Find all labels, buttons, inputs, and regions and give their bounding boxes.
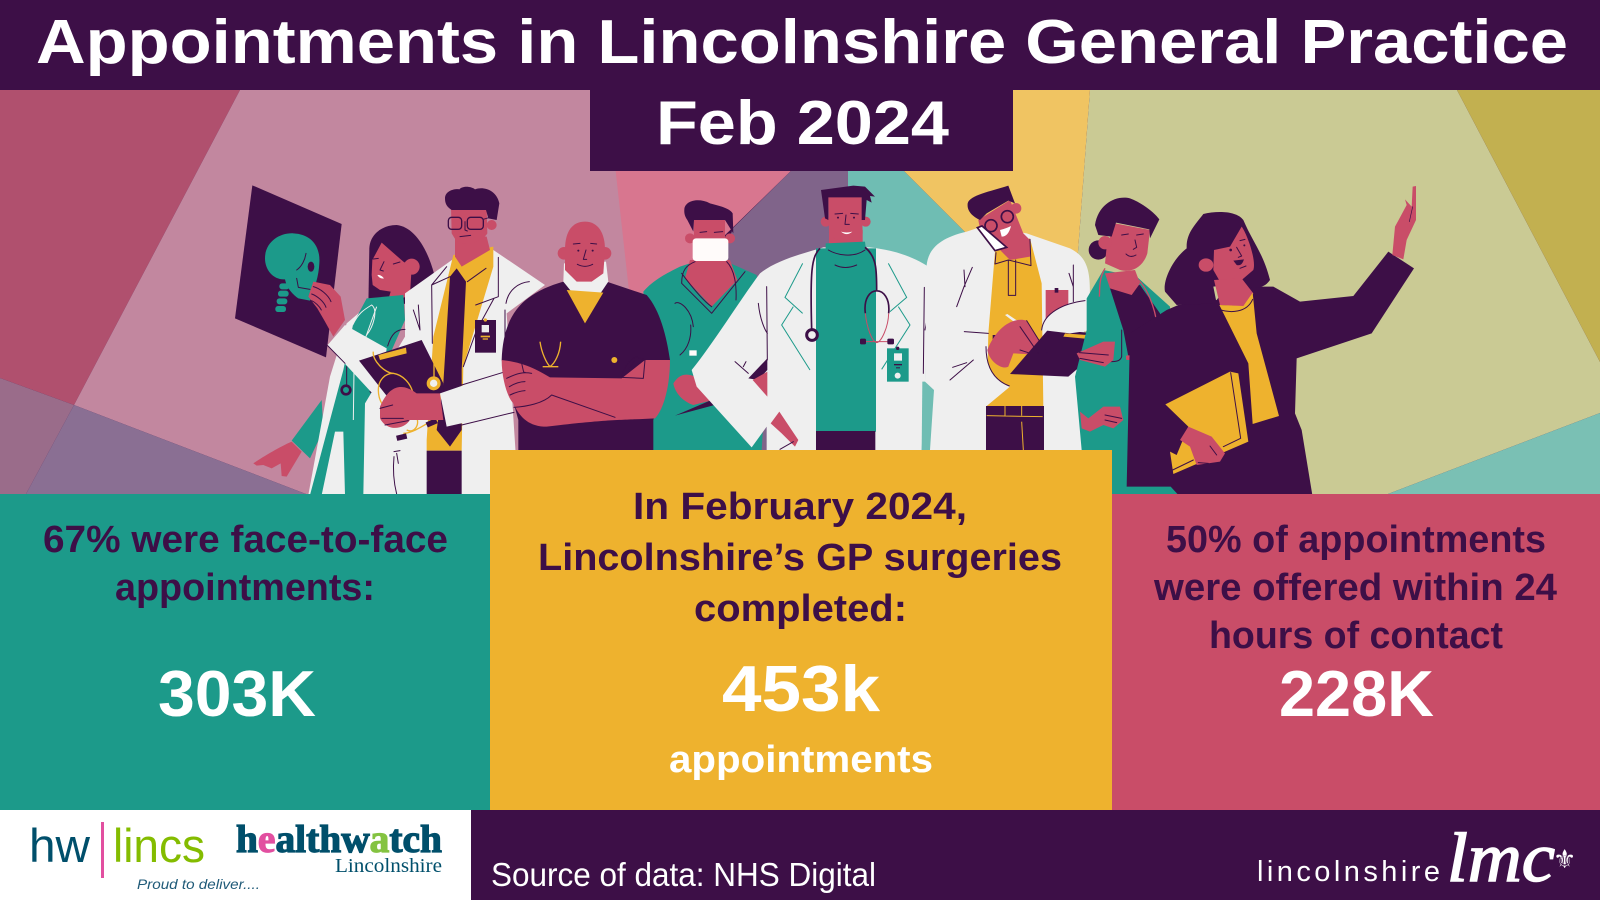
logo: hw lincs: lincs bbox=[113, 819, 205, 872]
logo: healthwatch Lincolnshire: healthwatch bbox=[236, 818, 442, 861]
figure: nurse with bun and woman in black bbox=[1075, 186, 1416, 495]
logo: healthwatch Lincolnshire: Lincolnshire bbox=[335, 855, 442, 877]
logo: hw lincs bbox=[29, 819, 260, 892]
figure: woman with x-ray and doctor with tie and bald man bbox=[235, 185, 670, 495]
logo: lincolnshire lmc: lincolnshire bbox=[1257, 856, 1440, 888]
figure: nurse with bun bbox=[1075, 198, 1179, 495]
figure: centre doctor with stethoscope bbox=[692, 186, 931, 450]
panel: within 24 hours: hours of contact bbox=[1209, 615, 1503, 657]
panel: total appointments: appointments bbox=[669, 739, 933, 781]
figure: woman in coat bbox=[253, 225, 434, 495]
figure: centre doctor and phone doctor bbox=[692, 186, 1155, 450]
panel: within 24 hours: 50% of appointments bbox=[1166, 519, 1546, 561]
figure: bald man with folded arms bbox=[502, 222, 670, 450]
panel: face-to-face: 67% were face-to-face bbox=[43, 519, 448, 561]
figure: nurse with mask bbox=[643, 200, 767, 450]
panel: total appointments: 453k bbox=[722, 652, 881, 725]
icon: x-ray with skull bbox=[235, 185, 342, 357]
panel: total appointments: completed: bbox=[694, 588, 907, 630]
logo: hw lincs: Proud to deliver.... bbox=[137, 876, 260, 892]
panel: total appointments: Lincolnshire’s GP surgeries bbox=[538, 537, 1062, 579]
panel: within 24 hours: 228K bbox=[1279, 657, 1434, 730]
title bar: Appointments in Lincolnshire General Practice bbox=[36, 8, 1568, 77]
logo: hw lincs: hw bbox=[29, 819, 91, 872]
logo: lincolnshire lmc: lmc bbox=[1447, 820, 1555, 897]
logo: lincolnshire lmc bbox=[1257, 820, 1576, 897]
figure: woman in black with yellow folder bbox=[1127, 186, 1416, 495]
panel: face-to-face: 303K bbox=[158, 657, 316, 730]
title bar bbox=[0, 0, 1600, 90]
logo: lincolnshire lmc: ⚜ bbox=[1553, 845, 1576, 875]
source note: Source of data: NHS Digital bbox=[491, 856, 876, 893]
panel: total appointments: In February 2024, bbox=[633, 486, 967, 528]
subtitle: Feb 2024 bbox=[590, 88, 1013, 171]
panel: total appointments bbox=[490, 450, 1112, 810]
panel: within 24 hours: were offered within 24 bbox=[1153, 567, 1557, 609]
footer white logo panel bbox=[0, 810, 471, 900]
geometric background bbox=[0, 90, 1600, 494]
panel: face-to-face bbox=[0, 494, 490, 810]
illustration: healthcare staff group bbox=[235, 185, 1416, 495]
figure: doctor with tie and clipboard bbox=[359, 187, 545, 495]
panel: face-to-face: appointments: bbox=[115, 567, 375, 609]
panel: within 24 hours bbox=[1112, 494, 1600, 810]
figure: doctor on phone bbox=[922, 186, 1155, 450]
subtitle: Feb 2024: Feb 2024 bbox=[656, 89, 950, 158]
